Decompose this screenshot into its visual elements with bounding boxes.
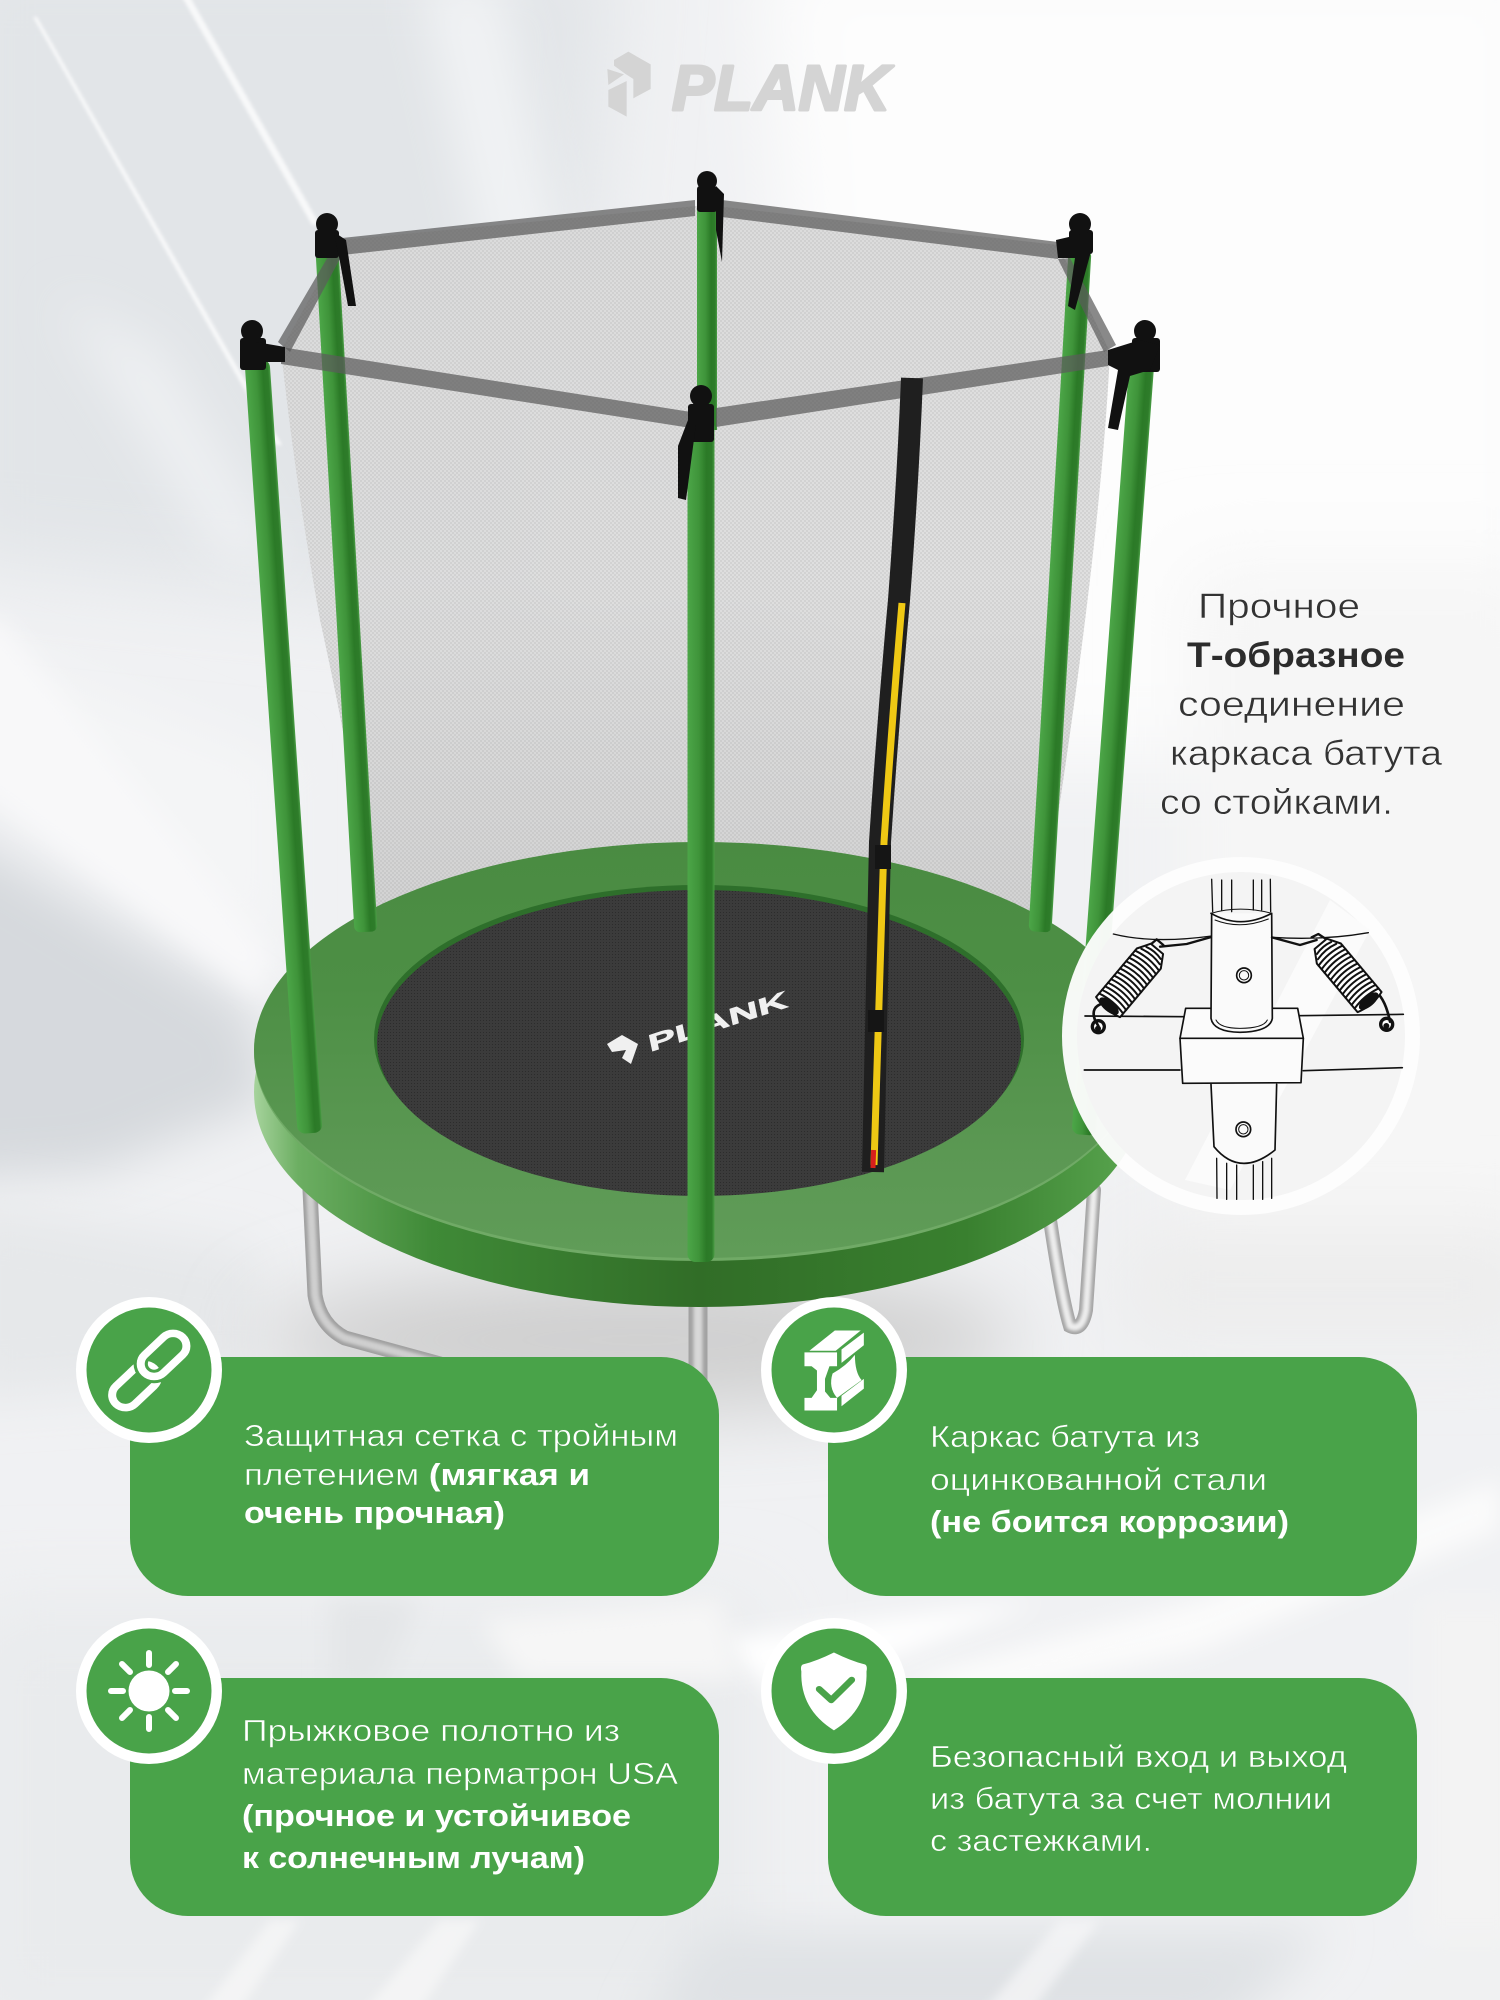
panel: galvanized frame xyxy=(761,1297,1417,1596)
text: jumping mat material: материала перматрон USA xyxy=(242,1756,678,1791)
text: jumping mat material: (прочное и устойчивое xyxy=(242,1798,631,1833)
mat logo text: PLANK xyxy=(646,987,790,1058)
text: protective net xyxy=(244,1418,678,1530)
back pole: right xyxy=(1028,249,1091,932)
door strip with zipper xyxy=(868,378,912,1172)
text: jumping mat material: Прыжковое полотно из xyxy=(242,1713,620,1748)
icon: steel beam xyxy=(761,1297,907,1443)
ring side xyxy=(254,877,1144,1307)
callout: T-connection text xyxy=(1160,587,1443,822)
icon: chain link xyxy=(76,1297,222,1443)
icon: logo mark xyxy=(607,52,651,117)
front pole: centre xyxy=(688,420,714,1262)
callout: T-connection text: Прочное xyxy=(1198,587,1360,626)
logo: PLANK xyxy=(607,52,895,124)
callout: T-connection text: соединение xyxy=(1178,685,1405,724)
text: protective net: очень прочная) xyxy=(244,1495,505,1530)
icon: sun xyxy=(76,1618,222,1764)
callout: T-connection text: Т-образное xyxy=(1187,636,1405,675)
mat logo mark xyxy=(607,1035,638,1064)
text: safe entry: с застежками. xyxy=(930,1823,1152,1858)
front pole: right xyxy=(1072,359,1154,1136)
text: jumping mat material: к солнечным лучам) xyxy=(242,1840,585,1875)
ring top face xyxy=(254,842,1144,1258)
line drawing: frame joint xyxy=(1084,879,1403,1199)
callout: T-connection text: каркаса батута xyxy=(1170,734,1443,773)
text: safe entry xyxy=(930,1739,1347,1858)
text: jumping mat material xyxy=(242,1713,678,1875)
text: galvanized frame: Каркас батута из xyxy=(930,1419,1200,1454)
text: galvanized frame xyxy=(930,1419,1289,1539)
back pole: centre xyxy=(697,205,717,430)
spring: left xyxy=(1094,939,1169,1020)
logo wordmark: PLANK xyxy=(672,52,895,124)
mat logo xyxy=(607,987,790,1064)
callout: T-connection detail circle xyxy=(1062,857,1420,1215)
pole caps and straps xyxy=(240,171,1160,500)
callout: T-connection text: со стойками. xyxy=(1160,783,1393,822)
spring: right xyxy=(1309,934,1384,1015)
text: safe entry: Безопасный вход и выход xyxy=(930,1739,1347,1774)
ring lip highlight xyxy=(254,843,1144,1261)
back pole: left xyxy=(316,249,377,933)
front pole: left xyxy=(245,359,323,1134)
text: galvanized frame: (не боится коррозии) xyxy=(930,1504,1289,1539)
safety net xyxy=(281,205,1110,960)
text: galvanized frame: оцинкованной стали xyxy=(930,1462,1267,1497)
panel: protective net xyxy=(76,1297,719,1596)
trampoline base xyxy=(254,842,1144,1307)
jumping mat xyxy=(377,890,1021,1196)
icon: shield with check xyxy=(761,1618,907,1764)
panel: jumping mat material xyxy=(76,1618,719,1916)
mat edge xyxy=(374,885,1024,1193)
text: protective net: Защитная сетка с тройным xyxy=(244,1418,678,1453)
text: protective net: плетением (мягкая и xyxy=(244,1457,590,1492)
net top bands xyxy=(278,200,1116,428)
panel: safe entry xyxy=(761,1618,1417,1916)
text: safe entry: из батута за счет молнии xyxy=(930,1781,1332,1816)
trampoline legs xyxy=(310,1190,1094,1420)
